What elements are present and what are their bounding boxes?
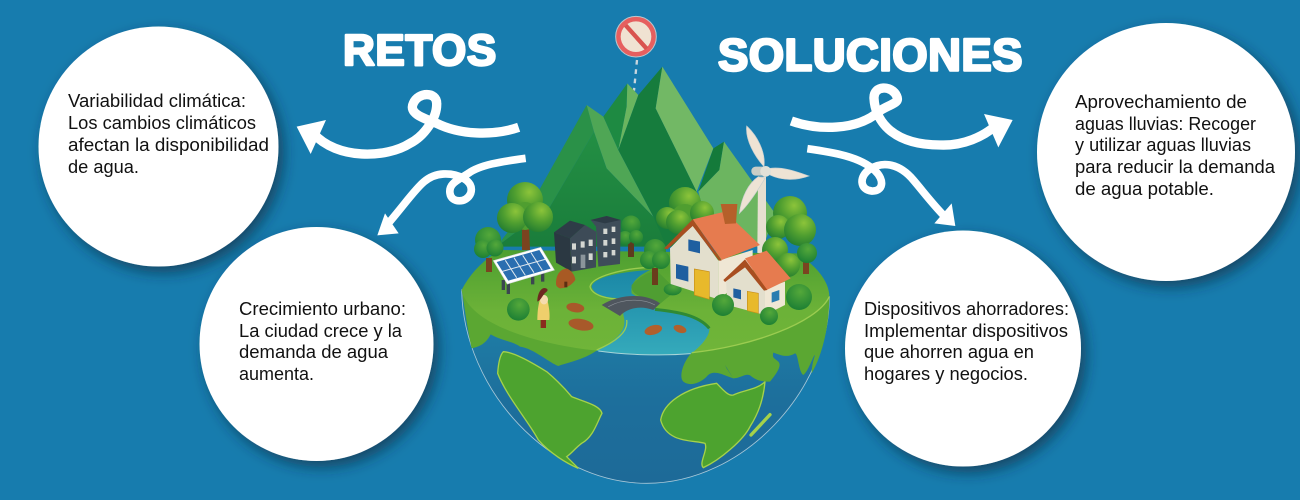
continent: americas [498, 352, 602, 468]
arrow: retos to variabilidad [297, 95, 519, 154]
panel: dispositivos ahorradores: que ahorren agua en [864, 341, 1034, 362]
logs [566, 302, 688, 337]
tree: large right [766, 196, 816, 246]
arrow: soluciones to aguas lluvias [791, 88, 1013, 147]
illustration: globe hemisphere [462, 247, 829, 483]
tree: small right [797, 243, 817, 274]
panel: crecimiento urbano: La ciudad crece y la [239, 320, 403, 341]
panel: dispositivos ahorradores [845, 230, 1081, 466]
illustration: large house [664, 204, 760, 299]
tree: behind house [656, 187, 714, 234]
panel: crecimiento urbano: Crecimiento urbano: [239, 298, 406, 319]
tree: small left [474, 227, 504, 272]
title: RETOS: RETOS [343, 26, 497, 75]
river [592, 270, 709, 355]
panel: aprovechamiento de aguas lluvias: de agua potable. [1075, 178, 1214, 199]
land front left with drips [462, 290, 627, 366]
illustration: small house [723, 251, 791, 315]
arrow: soluciones to dispositivos [807, 149, 955, 226]
panel: aprovechamiento de aguas lluvias: aguas lluvias: Recoger [1075, 113, 1256, 134]
land front right with drips [681, 297, 829, 384]
bushes behind small house [762, 237, 800, 277]
river banks [590, 267, 829, 353]
tree: large left [497, 182, 553, 250]
ocean [462, 273, 829, 483]
panel: aprovechamiento de aguas lluvias: y utilizar aguas lluvias [1075, 134, 1251, 155]
land top surface [462, 250, 829, 353]
bushes: foreground right [712, 284, 812, 325]
panel: variabilidad climática: Los cambios climáticos [68, 112, 256, 133]
illustration: trees [474, 182, 817, 285]
panel: dispositivos ahorradores: Dispositivos ahorradores: [864, 298, 1069, 319]
panel: crecimiento urbano: aumenta. [239, 363, 314, 384]
person [537, 288, 550, 328]
icon: small hut [556, 269, 575, 288]
panel: crecimiento urbano: demanda de agua [239, 341, 389, 362]
panel: variabilidad climática: afectan la disponibilidad [68, 134, 269, 155]
tree: behind buildings [618, 216, 643, 257]
continent: africa [661, 382, 765, 468]
panel: aprovechamiento de aguas lluvias: para reducir la demanda [1075, 156, 1276, 177]
bridge [602, 296, 660, 316]
panel: aprovechamiento de aguas lluvias: Aprovechamiento de [1075, 91, 1247, 112]
tree: front middle [640, 239, 670, 285]
title: SOLUCIONES: SOLUCIONES [718, 30, 1023, 80]
panel: crecimiento urbano [200, 227, 434, 461]
icon: prohibition sign with dashed line [616, 16, 656, 91]
panel: aprovechamiento de aguas lluvias [1037, 23, 1295, 281]
illustration: wind turbine [739, 126, 809, 253]
illustration: dark buildings [554, 216, 621, 272]
panel: dispositivos ahorradores: Implementar dispositivos [864, 320, 1068, 341]
panel: dispositivos ahorradores: hogares y negocios. [864, 363, 1028, 384]
solar panel [493, 247, 554, 294]
panel: variabilidad climática [38, 26, 278, 266]
island [751, 415, 770, 435]
panel: variabilidad climática: Variabilidad climática: [68, 90, 246, 111]
bushes [507, 283, 682, 321]
panel: variabilidad climática: de agua. [68, 156, 139, 177]
arrow: retos to crecimiento [377, 158, 526, 235]
illustration: mountains [497, 67, 775, 247]
